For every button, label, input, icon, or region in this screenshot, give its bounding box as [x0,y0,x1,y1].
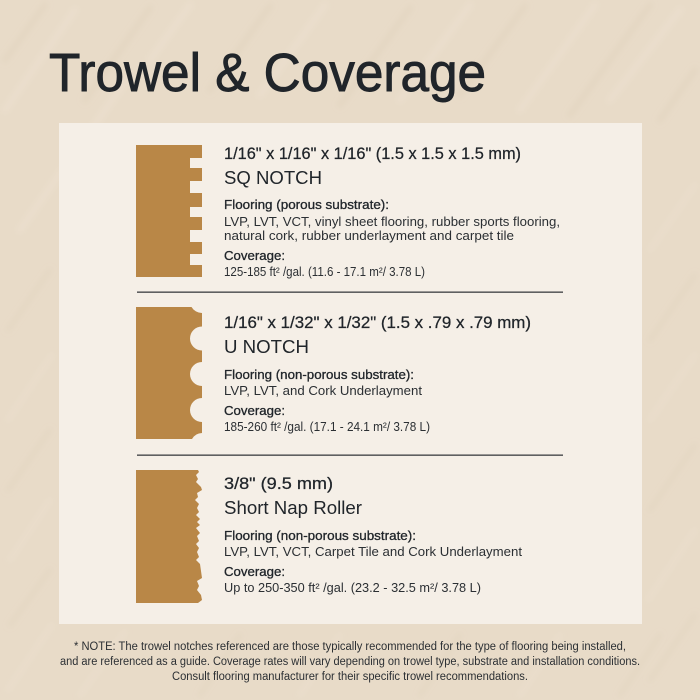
text: square notch details: SQ NOTCH [224,168,322,188]
text: roller details: Flooring (non-porous substrate): [224,528,416,543]
text: square notch details: 1/16" x 1/16" x 1/16" (1.5 x 1.5 x 1.5 mm) [224,144,521,163]
text: U notch details: Flooring (non-porous substrate): [224,367,414,382]
text: roller details: LVP, LVT, VCT, Carpet Tile and Cork Underlayment [224,545,523,559]
text: square notch details: Flooring (porous substrate): [224,197,389,212]
icon: square notch trowel [136,145,202,277]
text: roller details: 3/8" (9.5 mm) [224,474,333,493]
icon: short nap roller [136,470,202,603]
text: U notch details: Coverage: [224,403,285,418]
text: roller details: Short Nap Roller [224,498,362,518]
footnote [60,641,640,683]
text: square notch details: natural cork, rubber underlayment and carpet tile [224,229,514,243]
text: roller details: Coverage: [224,564,285,579]
title: Trowel & Coverage [49,43,486,103]
text: U notch details: LVP, LVT, and Cork Underlayment [224,384,423,398]
text: square notch details: LVP, LVT, VCT, vinyl sheet flooring, rubber sports flooring, [224,215,560,229]
text: square notch details: 125-185 ft² /gal. (11.6 - 17.1 m²/ 3.78 L) [224,265,425,279]
footnote: Consult flooring manufacturer for their specific trowel recommendations. [172,671,528,683]
text: roller details: Up to 250-350 ft² /gal. (23.2 - 32.5 m²/ 3.78 L) [224,581,481,595]
text: square notch details [224,144,560,279]
footnote: and are referenced as a guide. Coverage rates will vary depending on trowel type, substrate and installation conditions. [60,656,640,668]
text: U notch details: 185-260 ft² /gal. (17.1 - 24.1 m²/ 3.78 L) [224,420,430,434]
text: U notch details: 1/16" x 1/32" x 1/32" (1.5 x .79 x .79 mm) [224,313,531,332]
text: U notch details: U NOTCH [224,337,309,357]
panel: trowel list [59,123,642,624]
footnote: * NOTE: The trowel notches referenced are those typically recommended for the type of flooring being installed, [74,641,626,653]
text: square notch details: Coverage: [224,248,285,263]
text: roller details [224,474,523,595]
text: U notch details [224,313,531,434]
icon: U notch trowel [136,307,202,439]
